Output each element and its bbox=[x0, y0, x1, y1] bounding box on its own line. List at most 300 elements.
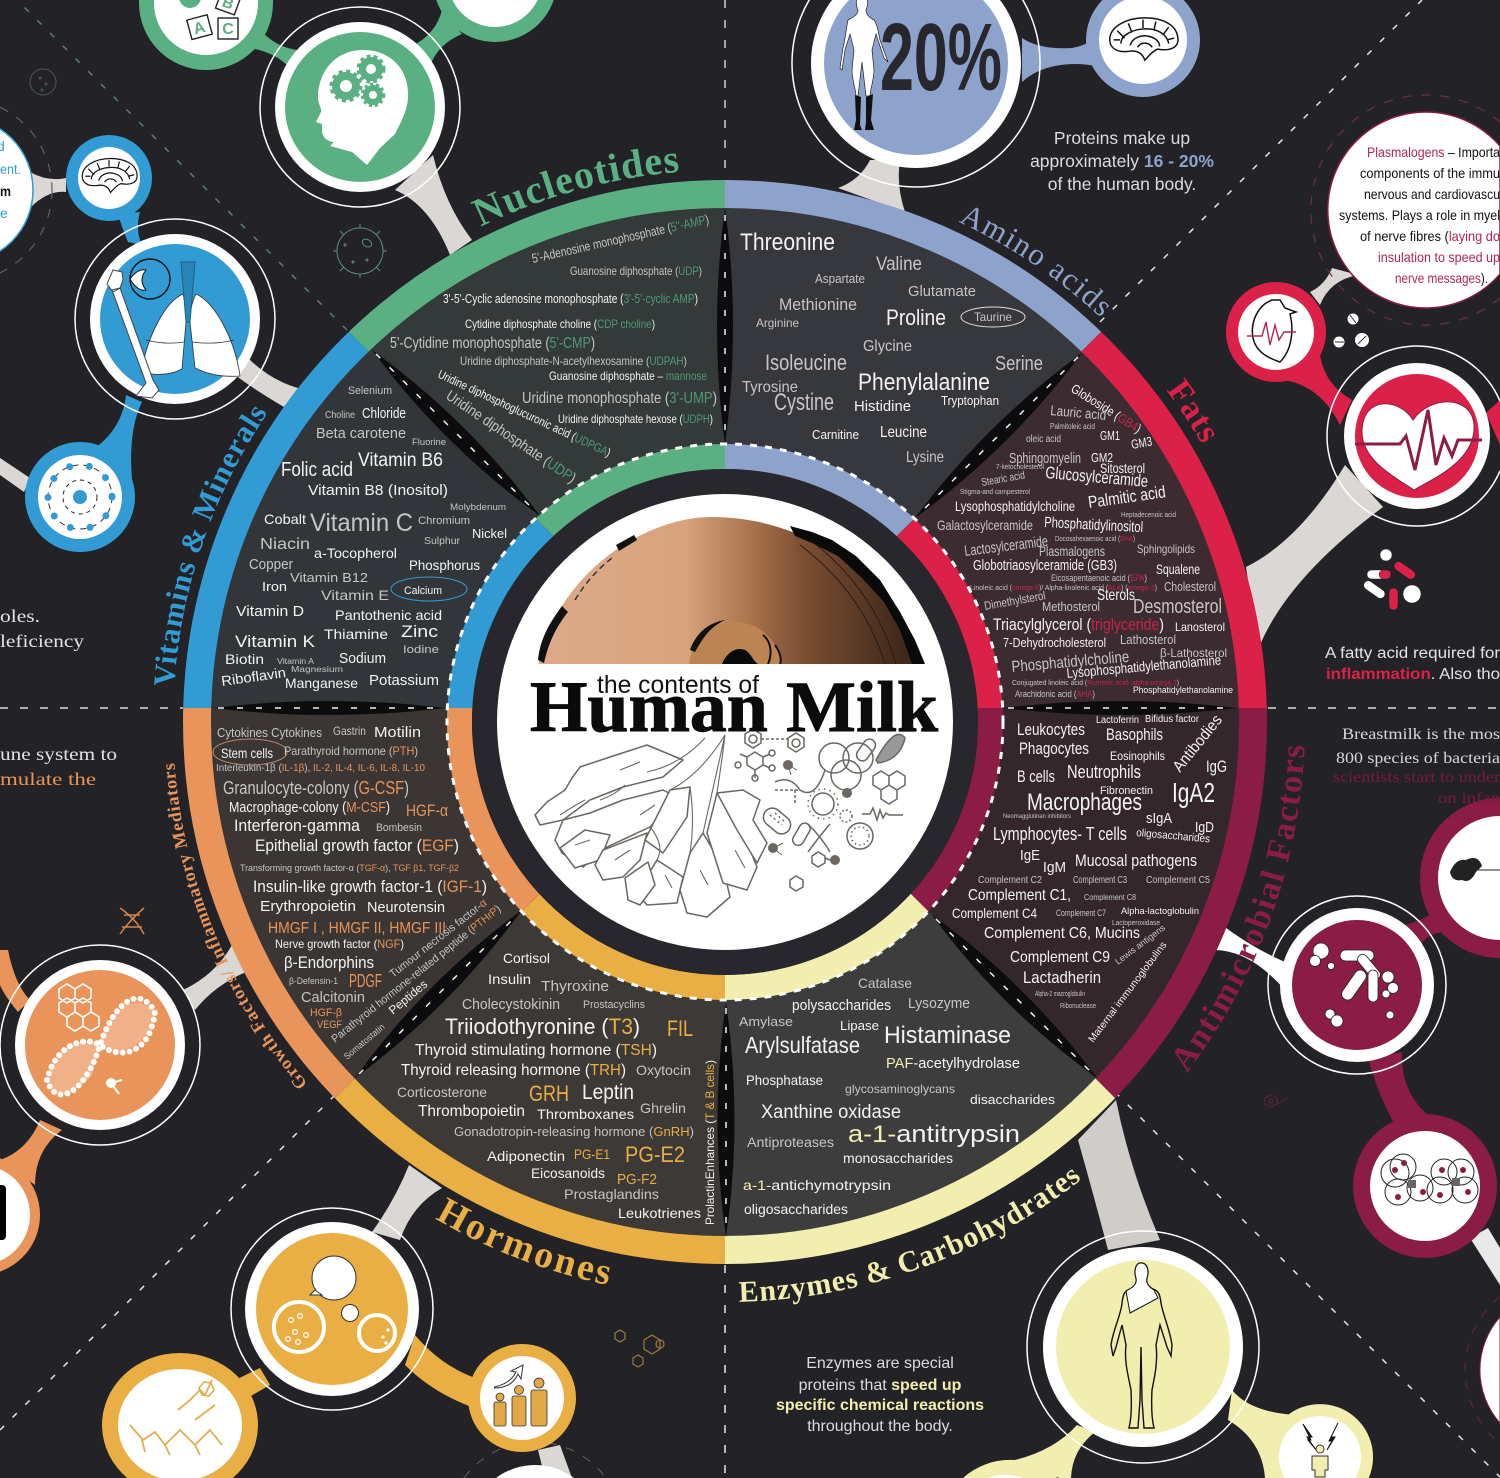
panel text: fats: Palmitoleic acid bbox=[1050, 422, 1095, 431]
panel text: growth factors: HGF-β bbox=[310, 1007, 342, 1019]
panel text: hormones: Cortisol bbox=[503, 950, 550, 966]
panel text: growth factors: Insulin-like growth factor-1 (IGF-1) bbox=[253, 877, 487, 896]
panel text: vitamins: Manganese bbox=[285, 675, 358, 691]
node cluster: nucleotides bbox=[30, 0, 557, 278]
panel text: antimicrobial: Macrophages bbox=[1027, 789, 1142, 816]
panel text: fats: Methosterol bbox=[1042, 599, 1100, 614]
panel text: enzymes: Lysozyme bbox=[908, 995, 970, 1012]
panel text: amino acids: Proline bbox=[886, 305, 946, 330]
panel text: vitamins: Choline bbox=[325, 410, 355, 421]
central disc bbox=[472, 469, 978, 975]
panel text: nucleotides: 5'-Cytidine monophosphate (5'-CMP) bbox=[390, 335, 595, 352]
panel text: growth factors: Neurotensin bbox=[367, 899, 445, 916]
panel text: enzymes: glycosaminoglycans bbox=[845, 1082, 955, 1096]
icon: eye bone lungs bbox=[75, 219, 275, 419]
panel text: amino acids: Tryptophan bbox=[941, 393, 999, 408]
panel text: nucleotides: Guanosine diphosphate (UDP) bbox=[570, 264, 702, 278]
panel text: vitamins: Vitamin B8 (Inositol) bbox=[308, 482, 448, 499]
panel text: antimicrobial bbox=[952, 712, 1227, 1045]
panel text: amino acids bbox=[740, 229, 1043, 466]
panel text: hormones: Ghrelin bbox=[640, 1100, 686, 1116]
text: fatty acid note bbox=[1325, 645, 1500, 683]
panel text: vitamins: Thiamine bbox=[324, 626, 388, 642]
segment: hormones bbox=[334, 894, 725, 1264]
icon: human body bbox=[1027, 1231, 1259, 1463]
icon: alphabet blocks node bbox=[139, 0, 273, 70]
panel text: antimicrobial: IgA2 bbox=[1172, 777, 1215, 808]
icon: lactocyte cells bbox=[231, 1208, 433, 1410]
panel text: enzymes: oligosaccharides bbox=[744, 1201, 848, 1217]
icon: alphabet blocks node: A bbox=[192, 19, 208, 38]
panel text: growth factors: Motilin bbox=[374, 724, 421, 741]
icon: head with gears bbox=[260, 7, 460, 207]
panel text: growth factors: Interleukin-1β (IL-1β), IL-2, IL-4, IL-6, IL-8, IL-10 bbox=[216, 762, 425, 774]
text: breastmilk note: 800 species of bacteria bbox=[1336, 750, 1500, 767]
panel text: vitamins: Magnesium bbox=[291, 665, 343, 674]
label: vitamins and minerals: Vitamins & Minerals bbox=[154, 406, 266, 686]
panel text: vitamins: Riboflavin bbox=[220, 664, 287, 689]
panel text: vitamins: Vitamin A bbox=[277, 657, 315, 666]
panel text: enzymes: Histaminase bbox=[884, 1022, 1011, 1049]
panel text: fats: GM1 bbox=[1100, 428, 1120, 443]
dashed halo around left bubble bbox=[0, 98, 52, 282]
panel text: vitamins: Phosphorus bbox=[409, 557, 480, 573]
panel text: growth factors: Somatostatin bbox=[342, 1022, 387, 1062]
panel text: antimicrobial: Maternal immunoglobulins bbox=[1087, 940, 1169, 1045]
panel text: antimicrobial: Ribonuclease bbox=[1060, 1003, 1096, 1010]
label: fats: Fats bbox=[1166, 378, 1215, 442]
text: enzymes note: throughout the body. bbox=[807, 1418, 953, 1435]
panel text: hormones: PG-F2 bbox=[617, 1171, 657, 1188]
panel text: enzymes: monosaccharides bbox=[843, 1150, 953, 1166]
panel text: antimicrobial: Eosinophils bbox=[1110, 749, 1165, 763]
panel text: vitamins: Selenium bbox=[348, 385, 392, 397]
panel text: enzymes: Arylsulfatase bbox=[745, 1032, 860, 1058]
text: proteins note: Proteins make up bbox=[1054, 128, 1190, 148]
panel text: antimicrobial: Complement C2 bbox=[978, 875, 1042, 886]
panel text: vitamins: Beta carotene bbox=[316, 425, 406, 442]
panel text: amino acids: Threonine bbox=[740, 229, 835, 256]
panel text: vitamins: Nickel bbox=[472, 526, 507, 541]
text: breastmilk note: scientists start to under bbox=[1333, 769, 1500, 786]
panel text: fats: Palmitic acid bbox=[1087, 482, 1167, 512]
panel text: growth factors: Transforming growth factor-α (TGF-α), TGF β1, TGF-β2 bbox=[240, 863, 459, 874]
panel text: growth factors: Peptides bbox=[386, 977, 430, 1017]
panel text: nucleotides: Uridine diphosphate hexose (UDPH) bbox=[558, 412, 713, 426]
panel text: antimicrobial: Alpha-2 macroglobulin bbox=[1035, 991, 1085, 998]
node cluster: fats bbox=[1226, 95, 1500, 683]
text: left fragments: leficiency bbox=[0, 631, 84, 651]
panel text: antimicrobial: Bifidus factor bbox=[1145, 714, 1200, 725]
panel text: fats: Sitosterol bbox=[1100, 460, 1145, 476]
panel text: fats: Galactosylceramide bbox=[937, 517, 1033, 533]
panel text: amino acids: Methionine bbox=[779, 295, 857, 314]
callout: left bubble: ent. bbox=[0, 161, 21, 177]
panel text: fats: Eicosapentaenoic acid (EPA) bbox=[1051, 573, 1147, 583]
panel text: growth factors: Epithelial growth factor (EGF) bbox=[255, 836, 459, 855]
panel text: antimicrobial: Lewis antigens bbox=[1113, 922, 1168, 967]
panel text: antimicrobial: Lymphocytes- T cells bbox=[993, 824, 1127, 844]
panel text: amino acids: Taurine bbox=[974, 310, 1012, 324]
panel text: hormones: Thromboxanes bbox=[537, 1106, 634, 1122]
panel text: fats: Docosahexaenoic acid (DHA) bbox=[1055, 536, 1135, 543]
text: proteins note: approximately 16 - 20% bbox=[1030, 151, 1214, 171]
panel text: vitamins: Folic acid bbox=[281, 459, 353, 481]
icon: lobules line drawing bbox=[535, 735, 767, 917]
panel text: fats: Globoside (GB4) bbox=[1068, 381, 1144, 436]
panel text: growth factors: Macrophage-colony (M-CSF) bbox=[229, 799, 390, 816]
icon: stressed person node bbox=[1267, 1404, 1373, 1478]
text: immune fragment: mulate the bbox=[0, 769, 96, 789]
panel text: fats: Phosphatidylethanolamine bbox=[1133, 685, 1233, 695]
icon: small DNA bbox=[120, 908, 144, 934]
panel text: vitamins: Vitamin K bbox=[235, 632, 316, 651]
panel text: enzymes: a-1-antitrypsin bbox=[848, 1121, 1020, 1148]
panel text: vitamins: Sulphur bbox=[424, 536, 461, 547]
panel text: hormones bbox=[397, 950, 717, 1225]
panel text: vitamins: Vitamin E bbox=[321, 587, 389, 603]
node cluster: vitamins and minerals bbox=[0, 98, 298, 651]
text: proteins note: of the human body. bbox=[1048, 174, 1196, 194]
panel text: antimicrobial: IgG bbox=[1206, 757, 1227, 776]
icon: brain node blue bbox=[66, 135, 152, 221]
panel text: nucleotides: 5'-Adenosine monophosphate (5''-AMP) bbox=[530, 212, 710, 266]
panel text: antimicrobial: Complement C3 bbox=[1073, 875, 1127, 886]
icon: benzene rings bbox=[615, 1330, 664, 1367]
panel text: growth factors: β-Defensin-1 bbox=[289, 976, 338, 986]
node cluster: hormones bbox=[102, 1165, 664, 1478]
panel text: growth factors: Parathyroid hormone-related peptide (PTHrP) bbox=[329, 903, 503, 1045]
label: enzymes and carbohydrates: Enzymes & Carbohydrates bbox=[738, 1169, 1080, 1304]
panel text: amino acids: Lysine bbox=[906, 449, 944, 466]
panel text: hormones: Thyroxine bbox=[541, 978, 609, 995]
panel text: hormones: GRH bbox=[529, 1081, 569, 1106]
icon: faint molecule bbox=[1265, 1095, 1288, 1107]
main wheel segments bbox=[197, 194, 1253, 1250]
panel text: growth factors: Nerve growth factor (NGF) bbox=[275, 937, 404, 951]
panel text: vitamins: Vitamin B12 bbox=[290, 570, 368, 585]
panel text: growth factors: Bombesin bbox=[376, 822, 422, 834]
panel text: fats: Desmosterol bbox=[1133, 596, 1222, 618]
panel text: amino acids: Glutamate bbox=[908, 283, 976, 300]
panel text: fats: Dimethylsterol bbox=[983, 588, 1047, 613]
segment: amino acids bbox=[725, 180, 1102, 536]
panel text: fats: Lysophosphatidylcholine bbox=[955, 498, 1075, 514]
panel text: vitamins: Pantothenic acid bbox=[335, 607, 442, 623]
panel text: hormones: Triiodothyronine (T3) bbox=[445, 1014, 640, 1039]
callout: plasmalogens bbox=[1328, 112, 1500, 308]
panel text: antimicrobial: Basophils bbox=[1106, 725, 1163, 744]
panel text: antimicrobial: B cells bbox=[1017, 767, 1055, 786]
panel text: vitamins: Potassium bbox=[369, 672, 439, 689]
panel text: nucleotides: Uridine monophosphate (3'-UMP) bbox=[522, 390, 717, 407]
panel text: antimicrobial: Complement C7 bbox=[1056, 908, 1106, 918]
text: enzymes note bbox=[776, 1355, 984, 1435]
panel text: nucleotides: Cytidine diphosphate choline (CDP choline) bbox=[465, 317, 655, 331]
panel text: amino acids: Cystine bbox=[774, 389, 834, 416]
panel text: antimicrobial: IgM bbox=[1043, 859, 1066, 876]
panel text: fats: Globotriaosylceramide (GB3) bbox=[973, 557, 1117, 574]
panel text: hormones: Thyroid releasing hormone (TRH) bbox=[401, 1062, 626, 1079]
panel text: amino acids: Aspartate bbox=[815, 271, 865, 286]
panel text: hormones: Gonadotropin-releasing hormone (GnRH) bbox=[454, 1124, 694, 1139]
panel text: hormones: Corticosterone bbox=[397, 1084, 487, 1100]
text: fatty acid note: inflammation . Also tho bbox=[1326, 666, 1500, 683]
segment: vitamins bbox=[183, 332, 554, 708]
callout: left bubble: m bbox=[0, 183, 11, 199]
icon: atom node bbox=[25, 442, 135, 552]
panel text: enzymes: polysaccharides bbox=[792, 997, 891, 1014]
panel text: fats: Lactosylceramide bbox=[963, 533, 1049, 560]
icon: people growth node bbox=[468, 1344, 576, 1452]
panel text: antimicrobial: oligosaccharides bbox=[1136, 827, 1211, 845]
panel text: nucleotides bbox=[390, 212, 717, 487]
panel text: antimicrobial: Lactoperoxidase bbox=[1112, 920, 1160, 927]
dashed halo around red bubble bbox=[1311, 95, 1500, 325]
callout: left bubble bbox=[0, 117, 33, 263]
panel text: vitamins: Iron bbox=[262, 579, 287, 594]
panel text: fats bbox=[937, 381, 1233, 699]
text: left fragments bbox=[0, 606, 84, 651]
panel text: fats: Heptadecenoic acid bbox=[1121, 512, 1176, 519]
panel text: enzymes: Amylase bbox=[739, 1014, 793, 1029]
panel text: vitamins: Cobalt bbox=[264, 511, 306, 527]
segment: nucleotides bbox=[348, 180, 725, 536]
text: proteins note bbox=[1030, 128, 1214, 194]
panel text: antimicrobial: Antibodies bbox=[1170, 712, 1226, 776]
panel text: nucleotides: Uridine diphosphoglucuronic acid (UDPGA) bbox=[436, 367, 613, 460]
panel text: fats: Arachidonic acid (AHA) bbox=[1015, 689, 1095, 699]
text: breastmilk note: on infan bbox=[1438, 790, 1500, 807]
panel text: nucleotides: Uridine diphosphate (UDP) bbox=[443, 387, 579, 487]
icon: molecule oval node bbox=[102, 1353, 258, 1478]
panel text: growth factors: Gastrin bbox=[333, 724, 366, 738]
panel text: amino acids: Leucine bbox=[880, 424, 927, 441]
panel text: fats: Sterols bbox=[1097, 587, 1135, 604]
panel text: fats: Triacylglycerol (triglyceride) bbox=[993, 615, 1164, 634]
panel text: hormones: Oxytocin bbox=[636, 1062, 691, 1078]
panel text: hormones: Adiponectin bbox=[487, 1148, 565, 1164]
icon: upper partial node bbox=[1420, 798, 1500, 958]
panel text: vitamins: Calcium bbox=[404, 585, 442, 597]
panel text: antimicrobial: IgD bbox=[1195, 819, 1214, 836]
icon: bacteria circle bbox=[1268, 896, 1446, 1074]
panel text: hormones: FIL bbox=[667, 1016, 693, 1041]
panel text: vitamins: Copper bbox=[249, 556, 293, 573]
icon: breast illustration bbox=[538, 517, 925, 664]
panel text: vitamins: Chromium bbox=[418, 515, 470, 527]
panel text: hormones: Prostaglandins bbox=[564, 1186, 659, 1202]
panel text: hormones: Thrombopoietin bbox=[418, 1103, 525, 1120]
panel text: vitamins: Vitamin D bbox=[236, 603, 304, 620]
panel text: nucleotides: 3'-5'-Cyclic adenosine monophosphate (3'-5'-cyclic AMP) bbox=[443, 291, 698, 306]
icon: 20 percent body: 20% bbox=[880, 4, 1002, 111]
panel text: amino acids: Glycine bbox=[863, 338, 912, 355]
text: fatty acid note: A fatty acid required for bbox=[1325, 645, 1500, 662]
icon: faint cell bbox=[30, 69, 56, 95]
panel text: antimicrobial: Lactoferrin bbox=[1096, 715, 1139, 726]
panel text: growth factors: Interferon-gamma bbox=[234, 816, 360, 835]
panel text: vitamins bbox=[220, 385, 507, 691]
panel text: vitamins: Fluorine bbox=[412, 437, 446, 447]
icon: small tablets bbox=[1334, 314, 1369, 348]
panel text: antimicrobial: Complement C4 bbox=[952, 905, 1037, 921]
panel text: enzymes: Lipase bbox=[840, 1018, 879, 1033]
panel text: vitamins: Molybdenum bbox=[450, 502, 506, 512]
ring labels bbox=[154, 148, 1304, 1304]
text: enzymes note: specific chemical reactions bbox=[776, 1397, 984, 1414]
panel text: amino acids: Histidine bbox=[854, 398, 911, 415]
panel text: amino acids: Isoleucine bbox=[765, 350, 847, 375]
panel text: antimicrobial: Neomagglutinan inhibitors bbox=[1003, 814, 1071, 820]
panel text: fats: Lauric acid bbox=[1050, 402, 1107, 423]
title: Human Milk bbox=[530, 667, 938, 747]
panel text: hormones: Leukotrienes bbox=[618, 1205, 701, 1221]
panel text: fats: Lanosterol bbox=[1175, 620, 1225, 634]
panel text: hormones: Eicosanoids bbox=[531, 1165, 605, 1181]
panel text: antimicrobial: Phagocytes bbox=[1019, 739, 1089, 758]
panel text: growth factors: Cytokines Cytokines bbox=[217, 725, 322, 740]
panel text: enzymes: Xanthine oxidase bbox=[761, 1102, 901, 1123]
node cluster: enzymes bbox=[776, 1100, 1373, 1478]
text: immune fragment: une system to bbox=[0, 744, 117, 764]
panel text: vitamins: a-Tocopherol bbox=[314, 545, 397, 561]
panel text: antimicrobial: Lactadherin bbox=[1023, 968, 1101, 987]
panel text: enzymes: Catalase bbox=[858, 975, 912, 991]
panel text: fats: GM2 bbox=[1091, 450, 1113, 465]
panel text: fats: Conjugated linoleic acid (Rumenic acid- alpha-omega 3) bbox=[1012, 678, 1179, 687]
label: hormones: Hormones bbox=[435, 1197, 610, 1284]
panel text: growth factors: Parathyroid hormone (PTH) bbox=[284, 744, 418, 758]
panel text: amino acids: Carnitine bbox=[812, 427, 859, 442]
panel text: antimicrobial: Neutrophils bbox=[1067, 762, 1141, 782]
panel text: growth factors: Erythropoietin bbox=[260, 898, 356, 915]
text: breastmilk note bbox=[1333, 726, 1500, 807]
panel text: hormones: Cholecystokinin bbox=[462, 996, 560, 1013]
panel text: vitamins: Sodium bbox=[339, 650, 386, 667]
panel text: amino acids: Serine bbox=[995, 353, 1043, 375]
icon: 20 percent body bbox=[792, 0, 1040, 187]
text: immune fragment bbox=[0, 744, 117, 789]
panel text: fats: Lysophosphatidylethanolamine bbox=[1066, 652, 1222, 681]
segment separators bbox=[213, 208, 1237, 1237]
panel text: amino acids: Arginine bbox=[756, 316, 799, 330]
callout: left bubble: e bbox=[0, 205, 8, 221]
node cluster: proteins bbox=[792, 0, 1214, 212]
panel text: enzymes: Antiproteases bbox=[747, 1134, 834, 1150]
panel text: hormones: PG-E1 bbox=[574, 1146, 610, 1162]
panel text: fats: Linoleic acid (omega-6)/ Alpha-linolenic acid (ALA) (omega-3) bbox=[970, 583, 1157, 592]
icon: virus outline bbox=[333, 224, 387, 278]
panel text: amino acids: Tyrosine bbox=[742, 379, 798, 396]
panel text: fats: 7-ketocholesterol bbox=[996, 464, 1044, 471]
panel text: antimicrobial: Leukocytes bbox=[1017, 720, 1085, 739]
callout: plasmalogens: nerve messages). bbox=[1395, 270, 1488, 286]
node cluster: antimicrobial bbox=[1214, 726, 1500, 1444]
panel text: antimicrobial: Fibronectin bbox=[1100, 785, 1153, 797]
panel text: enzymes: PAF-acetylhydrolase bbox=[886, 1055, 1020, 1072]
panel text: fats: Cholesterol bbox=[1164, 579, 1216, 594]
panel text: enzymes: disaccharides bbox=[970, 1092, 1056, 1107]
segment: fats bbox=[896, 332, 1267, 708]
panel text: antimicrobial: Complement C6, Mucins bbox=[984, 925, 1140, 942]
panel text: nucleotides: Guanosine diphosphate – mannose bbox=[549, 369, 707, 383]
panel text: growth factors: Stem cells bbox=[221, 745, 273, 761]
icon: capsules bbox=[1362, 549, 1421, 610]
panel text: fats: Lathosterol bbox=[1120, 632, 1176, 647]
panel text: vitamins: Biotin bbox=[225, 651, 264, 667]
label: nucleotides: Nucleotides bbox=[470, 148, 678, 226]
panel text: fats: GM3 bbox=[1130, 434, 1153, 452]
panel text: antimicrobial: Complement C5 bbox=[1146, 875, 1210, 886]
icon: venn clusters node bbox=[1353, 1114, 1497, 1258]
panel text: fats: Plasmalogens bbox=[1039, 543, 1105, 559]
panel text: hormones: PG-E2 bbox=[625, 1142, 685, 1167]
panel text: enzymes: a-1-antichymotrypsin bbox=[743, 1177, 891, 1193]
panel text: fats: Squalene bbox=[1156, 561, 1200, 577]
panel text: antimicrobial: sIgA bbox=[1146, 810, 1172, 827]
panel text: hormones: Prostacyclins bbox=[583, 999, 645, 1011]
panel text: fats: Sphingolipids bbox=[1137, 542, 1195, 556]
panel text: growth factors: HMGF I , HMGF II, HMGF III bbox=[268, 920, 446, 937]
panel text: nucleotides: Uridine diphosphate-N-acetylhexosamine (UDPAH) bbox=[460, 354, 687, 368]
panel text: growth factors: PDGF bbox=[349, 971, 382, 991]
segment: growth factors bbox=[183, 708, 539, 1098]
panel text: enzymes bbox=[739, 975, 1056, 1217]
panel text: vitamins: Niacin bbox=[260, 536, 310, 553]
panel text: vitamins: Vitamin C bbox=[310, 509, 413, 537]
icon: anatomical heart node bbox=[1226, 282, 1326, 382]
panel text: hormones: ProlactinEnhances (T & B cells) bbox=[703, 1060, 717, 1225]
panel text: amino acids: Valine bbox=[876, 254, 922, 275]
icon: DNA circle bbox=[0, 945, 200, 1145]
label: growth factors: Growth Factors/ Inflammatory Mediators bbox=[166, 764, 305, 1088]
panel text: enzymes: Phosphatase bbox=[746, 1072, 823, 1088]
icon: brain node periwinkle bbox=[1086, 0, 1200, 97]
lower node partial bbox=[0, 1155, 40, 1275]
panel text: growth factors bbox=[213, 724, 503, 1062]
panel text: vitamins: Iodine bbox=[403, 644, 439, 656]
bubble partial bbox=[1465, 1296, 1500, 1444]
panel text: antimicrobial: Complement C1, bbox=[968, 887, 1071, 904]
panel text: amino acids: Phenylalanine bbox=[858, 369, 990, 396]
panel text: antimicrobial: Alpha-lactoglobulin bbox=[1121, 906, 1199, 916]
panel text: fats: Sphingomyelin bbox=[1009, 450, 1081, 467]
panel text: hormones: Insulin bbox=[488, 971, 531, 987]
text: breastmilk note: Breastmilk is the mos bbox=[1342, 726, 1500, 743]
panel text: antimicrobial: IgE bbox=[1020, 847, 1040, 864]
node cluster: growth factors bbox=[0, 744, 246, 1275]
segment: enzymes bbox=[725, 894, 1116, 1264]
panel text: growth factors: Calcitonin bbox=[301, 989, 365, 1006]
panel text: hormones: Leptin bbox=[582, 1081, 634, 1104]
panel text: vitamins: Vitamin B6 bbox=[358, 450, 443, 471]
panel text: fats: 7-Dehydrocholesterol bbox=[1003, 635, 1106, 650]
panel text: growth factors: Granulocyte-colony (G-CSF) bbox=[223, 778, 409, 798]
text: left fragments: oles. bbox=[0, 606, 40, 626]
panel text: fats: oleic acid bbox=[1026, 434, 1061, 445]
label: amino acids: Amino acids bbox=[958, 208, 1109, 316]
icon: heartbeat circle bbox=[1327, 346, 1500, 526]
title: the contents of bbox=[597, 671, 759, 699]
panel text: hormones: Thyroid stimulating hormone (TSH) bbox=[415, 1042, 657, 1059]
panel text: vitamins: Zinc bbox=[401, 622, 439, 641]
text: enzymes note: proteins that speed up bbox=[799, 1377, 962, 1394]
panel text: antimicrobial: Complement C8 bbox=[1084, 893, 1136, 902]
panel text: antimicrobial: Complement C9 bbox=[1010, 949, 1110, 966]
panel text: fats: Stearic acid bbox=[980, 469, 1026, 489]
panel text: growth factors: β-Endorphins bbox=[284, 953, 374, 972]
